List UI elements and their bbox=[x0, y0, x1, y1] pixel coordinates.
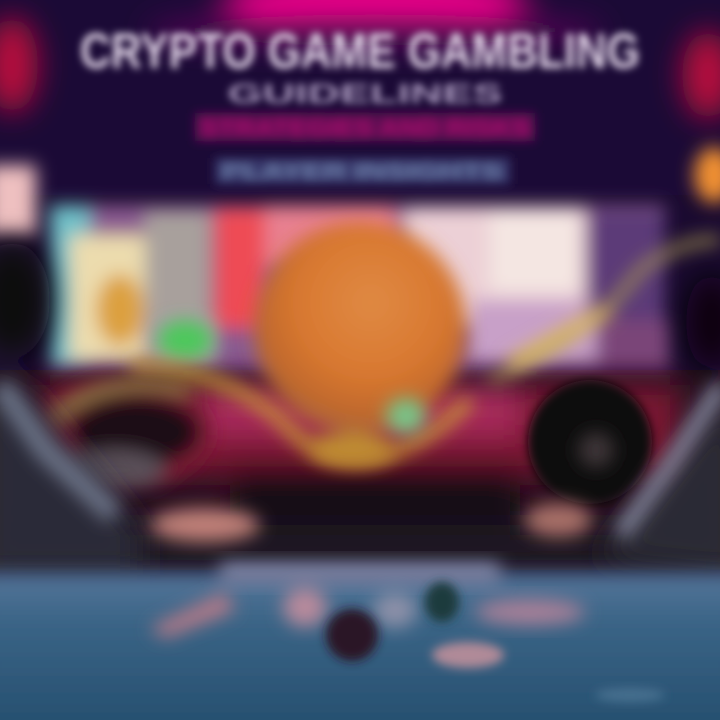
orange light at right bbox=[694, 147, 720, 203]
blue table bbox=[0, 562, 720, 720]
green accent bbox=[157, 320, 213, 360]
vinyl wheel right bbox=[528, 380, 652, 504]
swoosh ribbons bbox=[130, 240, 720, 458]
lower crimson stage bbox=[0, 385, 720, 570]
wheel left bbox=[40, 377, 210, 490]
colourful backdrop panels bbox=[50, 205, 670, 370]
side red lights bbox=[0, 17, 720, 119]
pink panel at left bbox=[0, 165, 36, 235]
green chip on sphere bbox=[386, 398, 426, 434]
left arm and hand bbox=[0, 385, 260, 542]
subtitle: GUIDELINES bbox=[228, 78, 502, 109]
central orange sphere bbox=[254, 222, 466, 466]
left person bbox=[0, 242, 140, 575]
top magenta glow bbox=[145, 0, 605, 46]
cards and chips on the table bbox=[150, 582, 665, 702]
magenta tagline bar: STRATEGIES AND RISKS bbox=[200, 115, 530, 142]
right arm and hand bbox=[524, 385, 720, 537]
blue-grey caption bar: PLAYER INSIGHTS bbox=[222, 161, 502, 183]
title: CRYPTO GAME GAMBLING bbox=[80, 23, 640, 79]
blue-grey caption bar bbox=[215, 158, 510, 184]
right person bbox=[600, 274, 720, 575]
